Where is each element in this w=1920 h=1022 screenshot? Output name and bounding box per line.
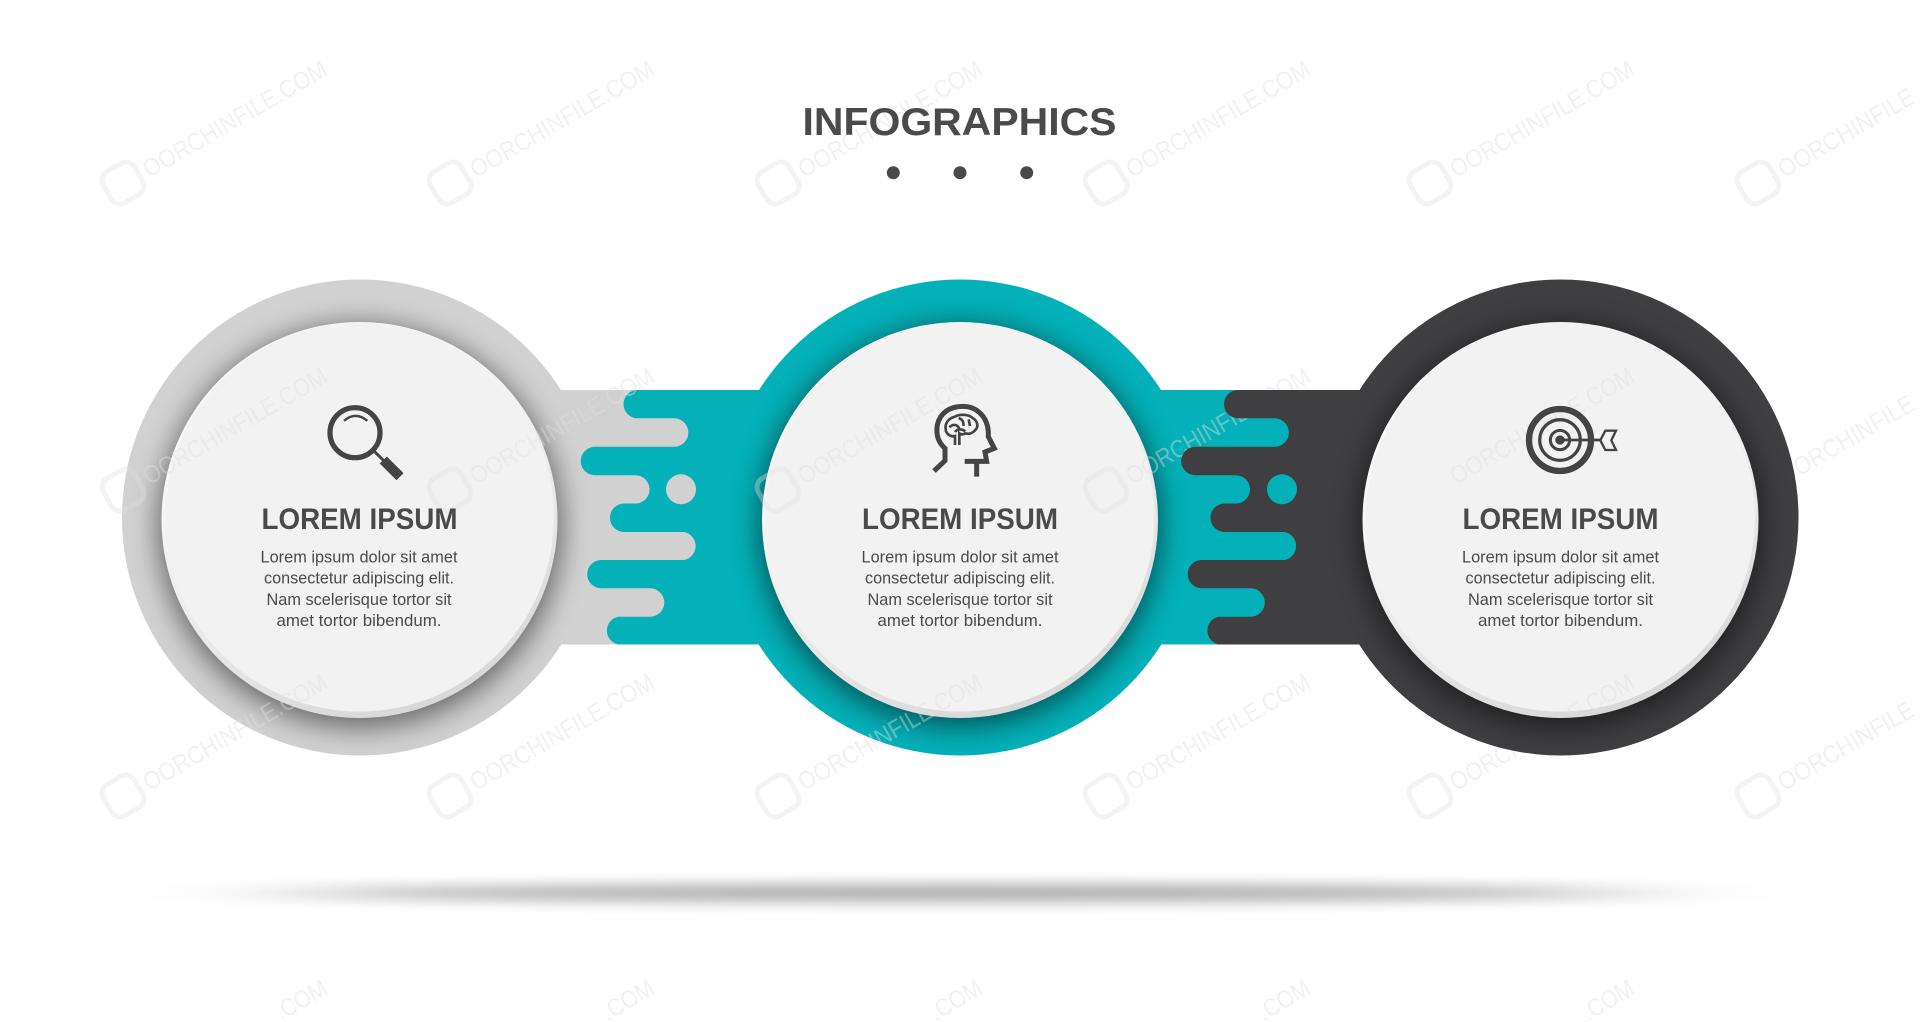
white disc — [762, 322, 1158, 718]
watermark on dark disc — [1468, 378, 1630, 718]
watermark pattern: OORCHINFILE.COM — [1445, 55, 1639, 183]
step 2 content — [862, 406, 1059, 630]
grey dot — [666, 474, 696, 504]
body text: amet tortor bibendum. — [1478, 612, 1643, 630]
body text — [1462, 548, 1659, 630]
watermark pattern: OORCHINFILE.COM — [138, 55, 332, 183]
watermark pattern: OORCHINFILE.COM — [793, 362, 987, 490]
watermark pattern: OORCHINFILE.COM — [793, 55, 987, 183]
body text: consectetur adipiscing elit. — [264, 570, 454, 588]
heading: LOREM IPSUM — [1462, 503, 1658, 536]
watermark pattern: OORCHINFILE.COM — [1445, 668, 1639, 796]
watermark pattern: OORCHINFILE.COM — [465, 668, 659, 796]
body text — [862, 548, 1059, 630]
white disc — [162, 322, 558, 718]
watermark pattern: OORCHINFILE.COM — [138, 668, 332, 796]
watermark pattern: OORCHINFILE.COM — [1445, 362, 1639, 490]
watermark pattern: OORCHINFILE.COM — [1121, 55, 1315, 183]
body text: Nam scelerisque tortor sit — [1468, 591, 1653, 609]
body text: Lorem ipsum dolor sit amet — [862, 548, 1059, 566]
white disc — [1362, 322, 1758, 718]
body text: amet tortor bibendum. — [878, 612, 1042, 630]
step 3 content — [1462, 409, 1659, 630]
watermark pattern: OORCHINFILE.COM — [1121, 362, 1315, 490]
step 1: grey circle — [122, 280, 740, 756]
heading: LOREM IPSUM — [262, 503, 458, 536]
step 1 content — [260, 408, 458, 630]
heading: LOREM IPSUM — [862, 503, 1058, 536]
body text: consectetur adipiscing elit. — [865, 570, 1055, 588]
watermark pattern: OORCHINFILE.COM — [793, 668, 987, 796]
step 3: dark circle — [1181, 280, 1798, 756]
disc shadow — [759, 325, 1161, 727]
watermark pattern: OORCHINFILE.COM — [465, 55, 659, 183]
grey ring and band — [122, 280, 740, 756]
body text: Lorem ipsum dolor sit amet — [1462, 548, 1659, 566]
watermark on dark disc: OORCHINFILE.COM — [1445, 362, 1639, 490]
body text: consectetur adipiscing elit. — [1466, 570, 1656, 588]
title dots — [887, 166, 1033, 179]
watermark pattern: OORCHINFILE.COM — [1121, 668, 1315, 796]
body text: Nam scelerisque tortor sit — [266, 591, 452, 609]
disc shadow — [159, 325, 561, 727]
disc shadow — [1360, 325, 1762, 727]
body text: Lorem ipsum dolor sit amet — [260, 548, 458, 566]
step 2: teal circle — [581, 280, 1340, 756]
icon: target with arrow — [1529, 409, 1616, 471]
icon: head with brain — [934, 406, 994, 477]
floor shadow — [280, 884, 1640, 902]
icon: magnifying glass — [330, 408, 400, 477]
watermark pattern: OORCHINFILE.COM — [465, 362, 659, 490]
teal ring and bands — [581, 280, 1340, 756]
body text: Nam scelerisque tortor sit — [868, 591, 1053, 609]
title: INFOGRAPHICS — [802, 101, 1116, 144]
body text: amet tortor bibendum. — [276, 612, 442, 630]
teal dot — [1267, 474, 1297, 504]
body text — [260, 548, 458, 630]
dark ring and band — [1181, 280, 1798, 756]
watermark pattern: OORCHINFILE.COM — [138, 362, 332, 490]
watermark on dark disc: OORCHINFILE.COM — [1445, 668, 1639, 796]
